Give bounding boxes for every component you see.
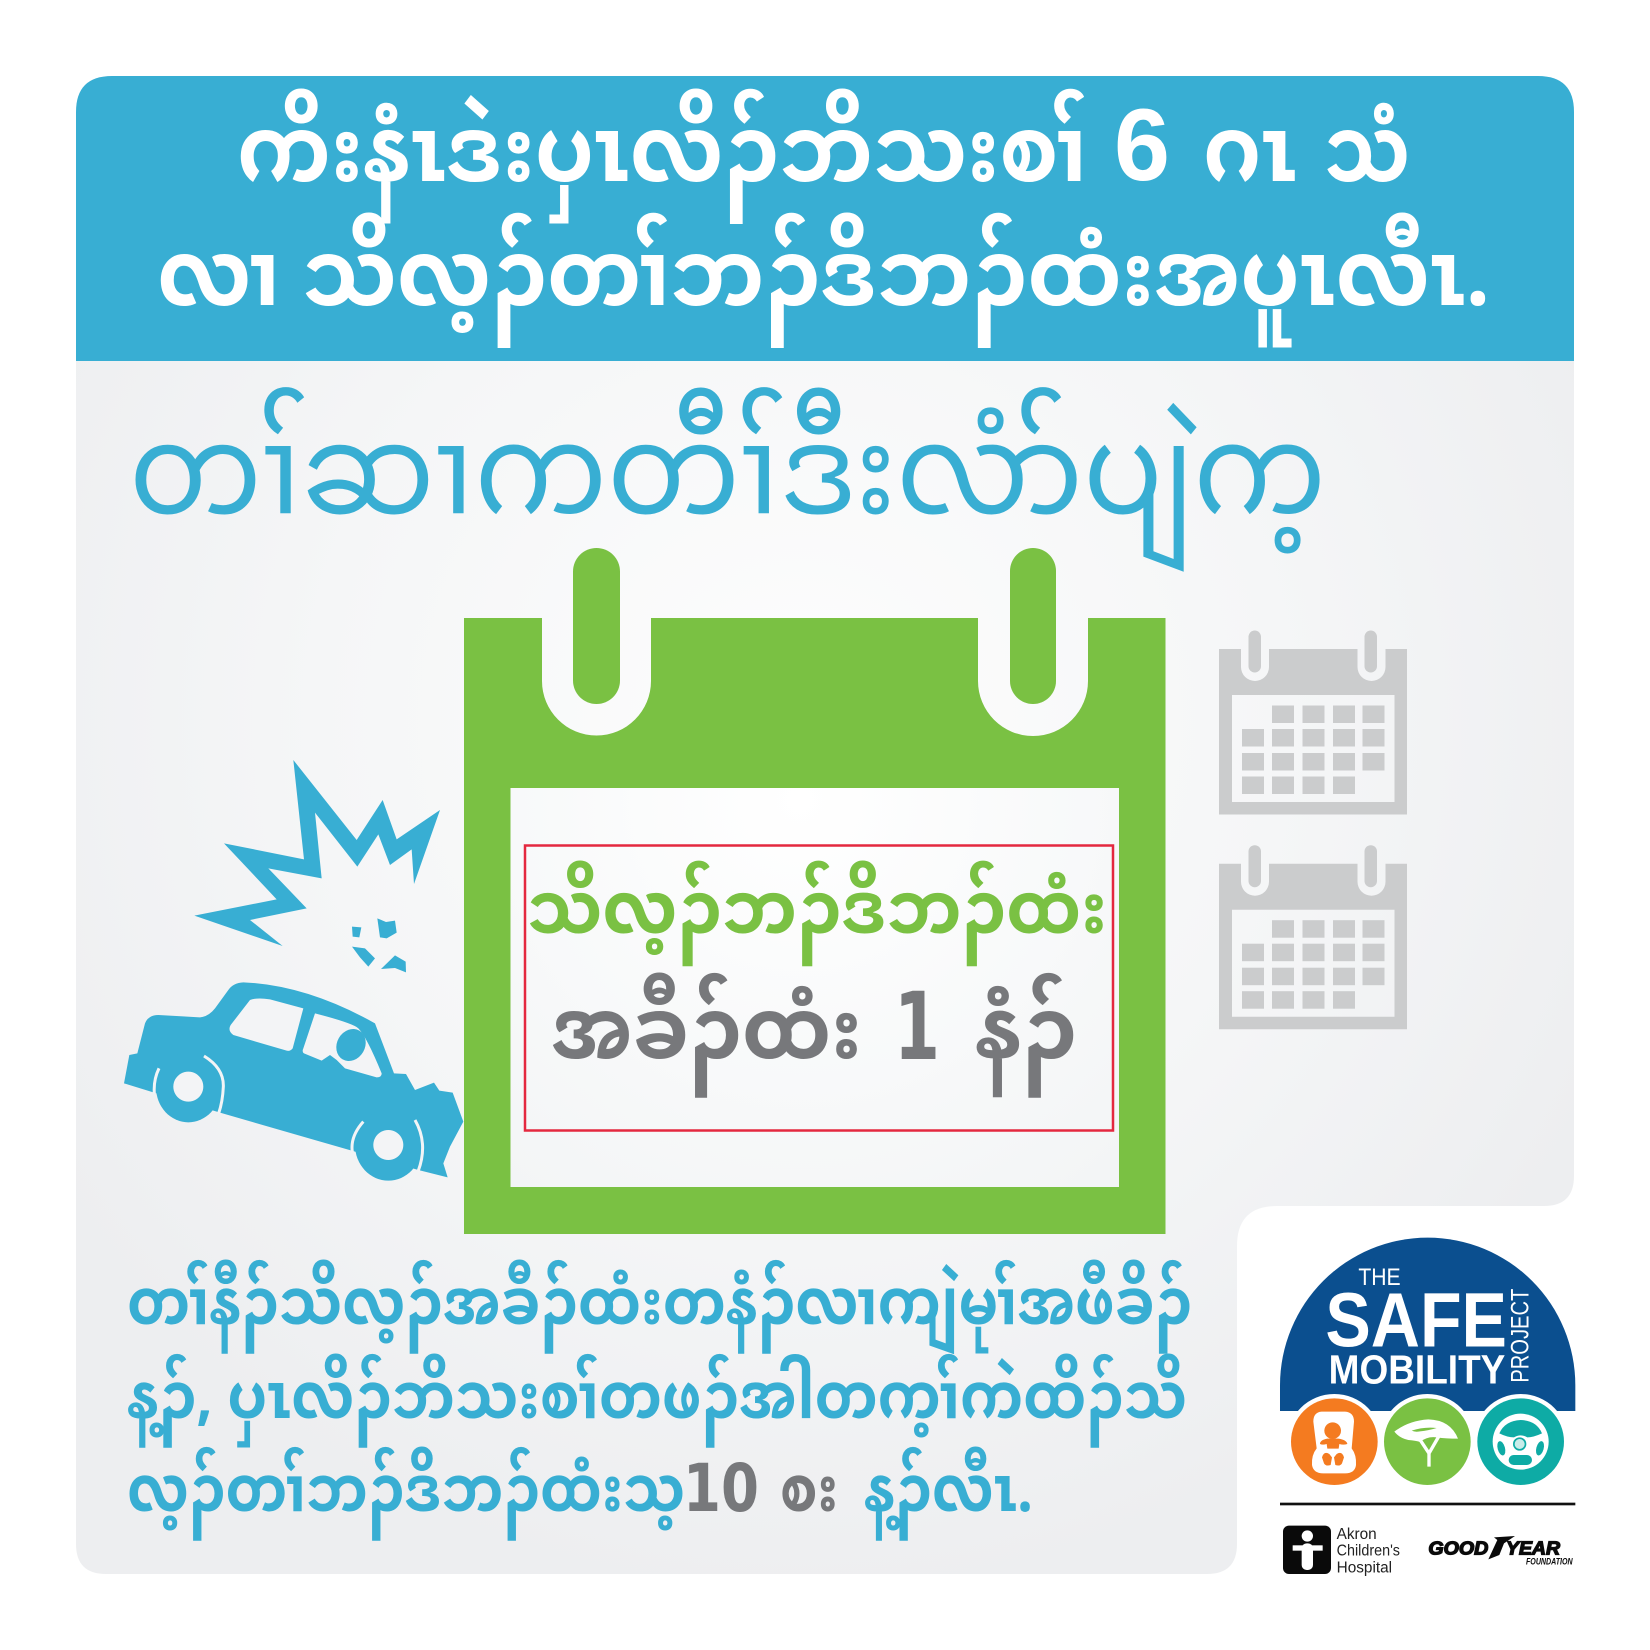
logo: Akron Children's Hospital: Children's bbox=[1337, 1543, 1400, 1560]
body line 2: န့ၣ်, ပှၤလိၣ်ဘိသးစၢ်တဖၣ်အါတက့ၢ်ကဲထိၣ်သိ bbox=[127, 1334, 1187, 1474]
logo dome bbox=[1280, 1238, 1575, 1411]
subheading: တၢ်ဆၢကတီၢ်ဒီးလံာ်ပျဲက့ bbox=[129, 347, 1326, 621]
logo: Akron Children's Hospital: Hospital bbox=[1337, 1559, 1392, 1576]
logo: Goodyear Foundation: YEAR bbox=[1506, 1537, 1561, 1558]
logo: Akron Children's Hospital bbox=[1283, 1526, 1400, 1576]
logo wordmark: THE bbox=[1358, 1264, 1401, 1291]
logo: Akron Children's Hospital: Akron bbox=[1337, 1526, 1377, 1543]
body line 3: လ့ၣ်တၢ်ဘၣ်ဒိဘၣ်ထံးသ့ bbox=[127, 1427, 685, 1567]
icon: helmet bbox=[1394, 1419, 1458, 1467]
title line 2: လၢ သိလ့ၣ်တၢ်ဘၣ်ဒိဘၣ်ထံးအပူၤလီၤ. bbox=[157, 184, 1490, 385]
divider rule bbox=[1280, 1503, 1575, 1505]
impact burst bbox=[194, 760, 440, 946]
logo: The Safe Mobility Project bbox=[1280, 1238, 1575, 1576]
body text bbox=[127, 1240, 1192, 1567]
body line 3: 10 bbox=[683, 1450, 759, 1527]
title line 1: ကိးနံၤဒဲးပှၤလိၣ်ဘိသးစၢ် bbox=[237, 60, 1087, 261]
calendar label: green: သိလ့ၣ်ဘၣ်ဒိဘၣ်ထံး bbox=[527, 838, 1107, 995]
calendar label: grey: နံၣ် bbox=[975, 948, 1077, 1131]
logo: Goodyear Foundation: GOOD bbox=[1428, 1537, 1488, 1558]
wheel hubs bbox=[173, 1072, 403, 1160]
icon: crashing car with impact burst bbox=[124, 760, 463, 1181]
logo: Goodyear Foundation: FOUNDATION bbox=[1526, 1556, 1573, 1566]
icon: small calendar bottom bbox=[1219, 845, 1407, 1029]
title line 1: ဂၤ bbox=[1203, 60, 1297, 261]
calendar label: grey bbox=[551, 948, 1077, 1131]
wheel arch gaps bbox=[154, 1056, 423, 1171]
icon: steering wheel bbox=[1493, 1414, 1549, 1470]
logo wordmark: MOBILITY bbox=[1329, 1346, 1505, 1392]
body line 3: စး bbox=[780, 1427, 838, 1567]
logo: Goodyear Foundation bbox=[1428, 1536, 1573, 1566]
panel: header banner bbox=[76, 60, 1574, 385]
icon: small calendar top bbox=[1219, 630, 1407, 814]
calendar label: grey: အခီၣ်ထံး bbox=[551, 948, 862, 1131]
logo icon circles bbox=[1280, 1394, 1575, 1489]
car windows bbox=[229, 998, 382, 1077]
callout box bbox=[525, 846, 1113, 1130]
logo wordmark bbox=[1325, 1264, 1534, 1392]
wheels bbox=[156, 1052, 221, 1122]
panel: main background bbox=[76, 340, 1574, 1574]
title line 1: သံ bbox=[1324, 60, 1410, 261]
logo wordmark: PROJECT bbox=[1506, 1289, 1534, 1383]
icon: large green calendar bbox=[464, 548, 1166, 1234]
title line 1: 6 bbox=[1114, 88, 1170, 202]
car body bbox=[124, 982, 463, 1177]
body line 3: န့ၣ်လီၤ. bbox=[864, 1427, 1033, 1567]
calendar label: grey: 1 bbox=[894, 973, 940, 1082]
body line 1: တၢ်နီၣ်သိလ့ၣ်အခီၣ်ထံးတနံၣ်လၢကျဲမုၢ်အဖီခိၣ် bbox=[127, 1240, 1192, 1380]
debris bbox=[352, 918, 406, 972]
logo wordmark: SAFE bbox=[1325, 1278, 1507, 1364]
icon: child seat bbox=[1312, 1412, 1356, 1473]
